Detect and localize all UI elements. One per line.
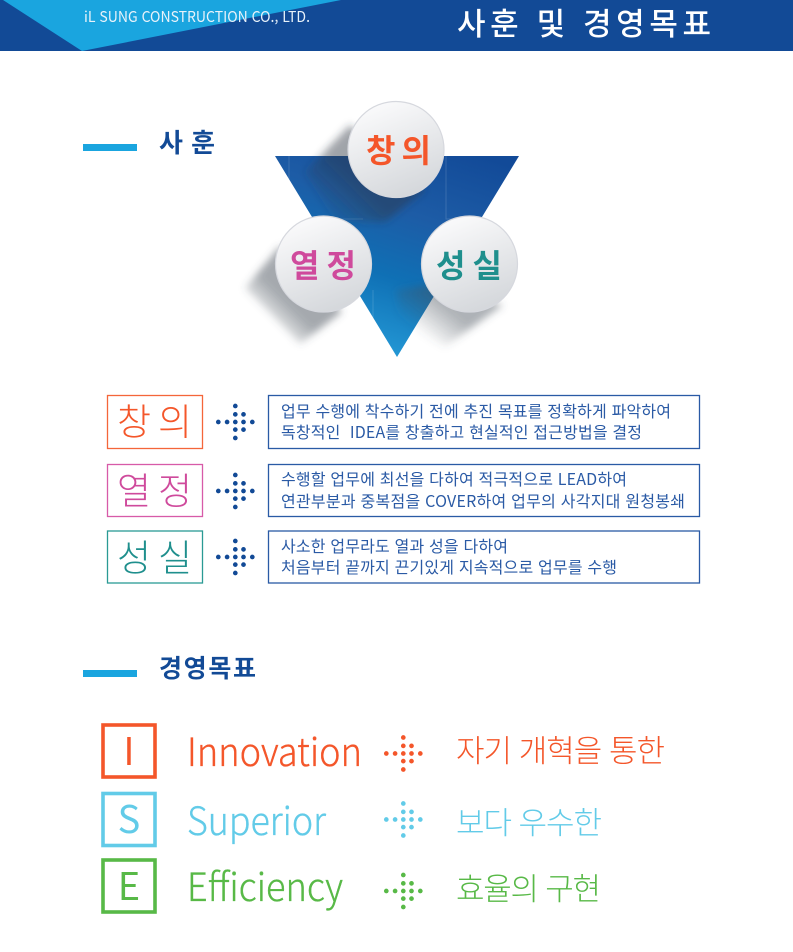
goal: Innovation [103,721,665,778]
header light-blue wedge [3,0,341,51]
circle: 열정 [276,216,372,312]
korean phrase: 효율의 구현 [456,864,601,909]
goal: Efficiency [103,856,601,913]
description box: 사소한 업무라도 열과 성을 다하여 [281,533,508,557]
company name: iL SUNG CONSTRUCTION CO., LTD. [84,6,310,27]
icon: dotted arrow [216,404,255,440]
description box [268,396,700,448]
description box: 연관부분과 중복점을 COVER하여 업무의 사각지대 원청봉쇄 [281,488,685,512]
korean phrase: 자기 개혁을 통한 [456,726,665,771]
label box: 열 정 [117,461,192,515]
section heading: 사훈 [83,123,215,160]
word: Superior [187,791,327,847]
description box: 독창적인 IDEA를 창출하고 현실적인 접근방법을 결정 [281,419,642,443]
letter box I: I [123,721,135,776]
goal: Superior [103,789,602,847]
word: Innovation [187,722,362,778]
diagram: triangle with three circles [245,102,519,357]
description box: 업무 수행에 착수하기 전에 추진 목표를 정확하게 파악하여 [281,398,671,422]
korean phrase: 보다 우수한 [456,798,602,843]
circle: 창의: 창 의 [366,126,431,172]
word: Efficiency [187,857,343,913]
row: 창의 [108,392,700,448]
circle: 성실 [422,216,518,312]
description box [268,531,700,583]
icon: dotted arrow [216,473,255,509]
section heading: 사훈: 사 훈 [159,123,215,160]
section heading: 경영목표 [83,649,256,685]
description box: 처음부터 끝까지 끈기있게 지속적으로 업무를 수행 [281,554,617,578]
description box: 수행할 업무에 최선을 다하여 적극적으로 LEAD하여 [281,466,627,490]
label box: 성 실 [117,528,192,582]
row: 열정 [108,461,700,516]
page title: 사훈 및 경영목표 [457,0,711,44]
long shadows [245,125,503,347]
icon: dotted arrow [384,801,423,838]
circle: 성실: 성 실 [436,241,502,287]
letter box S: S [118,789,140,844]
label box: 창 의 [117,392,192,446]
header banner [0,0,793,51]
section heading: 경영목표: 경영목표 [159,649,256,685]
letter box I [103,721,155,777]
row: 성실 [108,528,700,583]
circle: 열정: 열 정 [290,241,356,287]
icon: dotted arrow [384,735,423,772]
faint guide lines [289,156,483,340]
icon: dotted arrow [384,873,423,909]
icon: dotted arrow [216,539,255,575]
circle: 창의 [348,102,444,198]
letter box S [103,789,155,846]
description box [268,464,700,516]
inverted triangle [275,156,519,357]
letter box E [103,856,155,912]
letter box E: E [118,856,140,911]
